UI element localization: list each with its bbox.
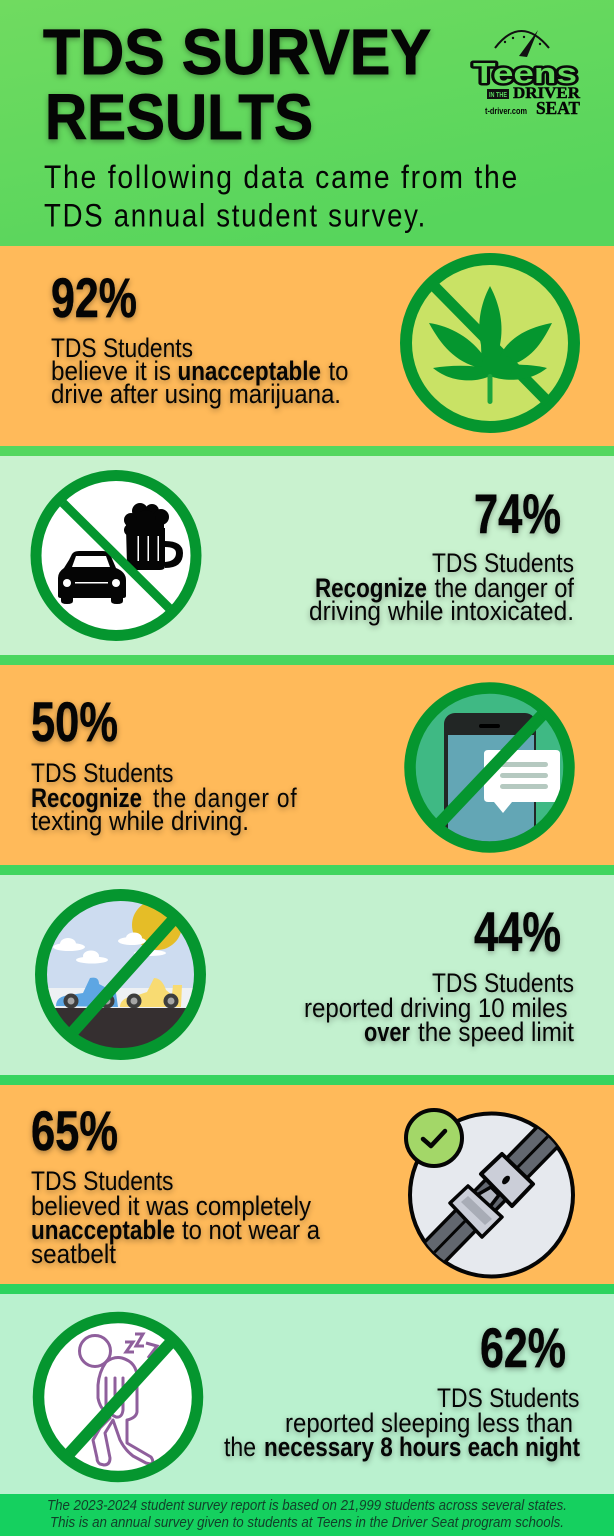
icon: no drunk driving [36, 476, 196, 636]
statistic 62% [224, 1316, 580, 1462]
logo: Teens in the Driver Seat: SEAT [536, 98, 580, 118]
statistic 44%: TDS Students [432, 968, 574, 998]
statistic 65% [31, 1099, 321, 1269]
panel: sleep [0, 1294, 614, 1494]
statistic 44%: reported driving 10 miles [304, 993, 568, 1023]
statistic 92%: drive after using marijuana. [51, 379, 341, 409]
statistic 50%: texting while driving. [31, 806, 249, 836]
panel: intoxicated driving [0, 456, 614, 655]
statistic 50%: TDS Students [31, 758, 174, 788]
statistic 74%: driving while intoxicated. [309, 596, 574, 626]
statistic 65%: unacceptable [31, 1215, 175, 1245]
panel: header [0, 0, 614, 246]
statistic 44% [304, 900, 574, 1047]
statistic 92%: 92% [51, 266, 137, 329]
title: RESULTS [45, 81, 313, 153]
logo: Teens in the Driver Seat: t-driver.com [485, 106, 527, 116]
statistic 50%: Recognize [31, 783, 142, 813]
statistic 74%: TDS Students [432, 548, 574, 578]
statistic 50%: the danger of [153, 783, 298, 813]
icon: no texting [410, 688, 569, 847]
statistic 65%: TDS Students [31, 1166, 174, 1196]
statistic 44%: 44% [474, 900, 561, 963]
statistic 62%: reported sleeping less than [285, 1408, 573, 1438]
subtitle [44, 159, 519, 234]
title [43, 16, 431, 153]
statistic 92%: TDS Students [51, 333, 193, 363]
panel: seatbelt [0, 1085, 614, 1284]
statistic 65%: believed it was completely [31, 1191, 311, 1221]
footer note: This is an annual survey given to students at Teens in the Driver Seat program schools. [50, 1515, 564, 1531]
subtitle: TDS annual student survey. [44, 198, 427, 234]
statistic 62%: TDS Students [437, 1383, 580, 1413]
footer note: The 2023-2024 student survey report is based on 21,999 students across several states. [47, 1498, 567, 1514]
statistic 50%: 50% [31, 690, 118, 753]
logo: Teens in the Driver Seat [473, 30, 580, 118]
statistic 65%: 65% [31, 1099, 118, 1162]
footer note [0, 1494, 614, 1536]
statistic 44%: the speed limit [418, 1017, 574, 1047]
panel: texting [0, 665, 614, 865]
statistic 92%: unacceptable [178, 356, 321, 386]
statistic 74%: the danger of [434, 573, 574, 603]
subtitle: The following data came from the [44, 159, 519, 195]
statistic 74% [309, 482, 574, 626]
statistic 65%: to not wear a [182, 1215, 321, 1245]
title: TDS SURVEY [43, 16, 431, 88]
statistic 65%: seatbelt [31, 1239, 116, 1269]
statistic 50% [31, 690, 298, 836]
logo: Teens in the Driver Seat: IN THE [489, 92, 507, 99]
statistic 92%: believe it is [51, 356, 171, 386]
statistic 44%: over [364, 1017, 410, 1047]
statistic 74%: Recognize [315, 573, 427, 603]
statistic 62%: 62% [480, 1316, 566, 1379]
panel: marijuana [0, 246, 614, 446]
statistic 74%: 74% [474, 482, 561, 545]
icon: no speeding [30, 894, 210, 1058]
statistic 92% [51, 266, 348, 409]
logo: Teens in the Driver Seat: DRIVER [513, 85, 580, 102]
logo: Teens in the Driver Seat: Teens [473, 58, 577, 90]
icon: no marijuana [406, 259, 574, 427]
icon: no sleep deprivation [38, 1317, 198, 1477]
statistic 62%: the [224, 1432, 256, 1462]
statistic 92%: to [328, 356, 348, 386]
icon: seatbelt [406, 1110, 573, 1276]
panel: speeding [0, 875, 614, 1075]
